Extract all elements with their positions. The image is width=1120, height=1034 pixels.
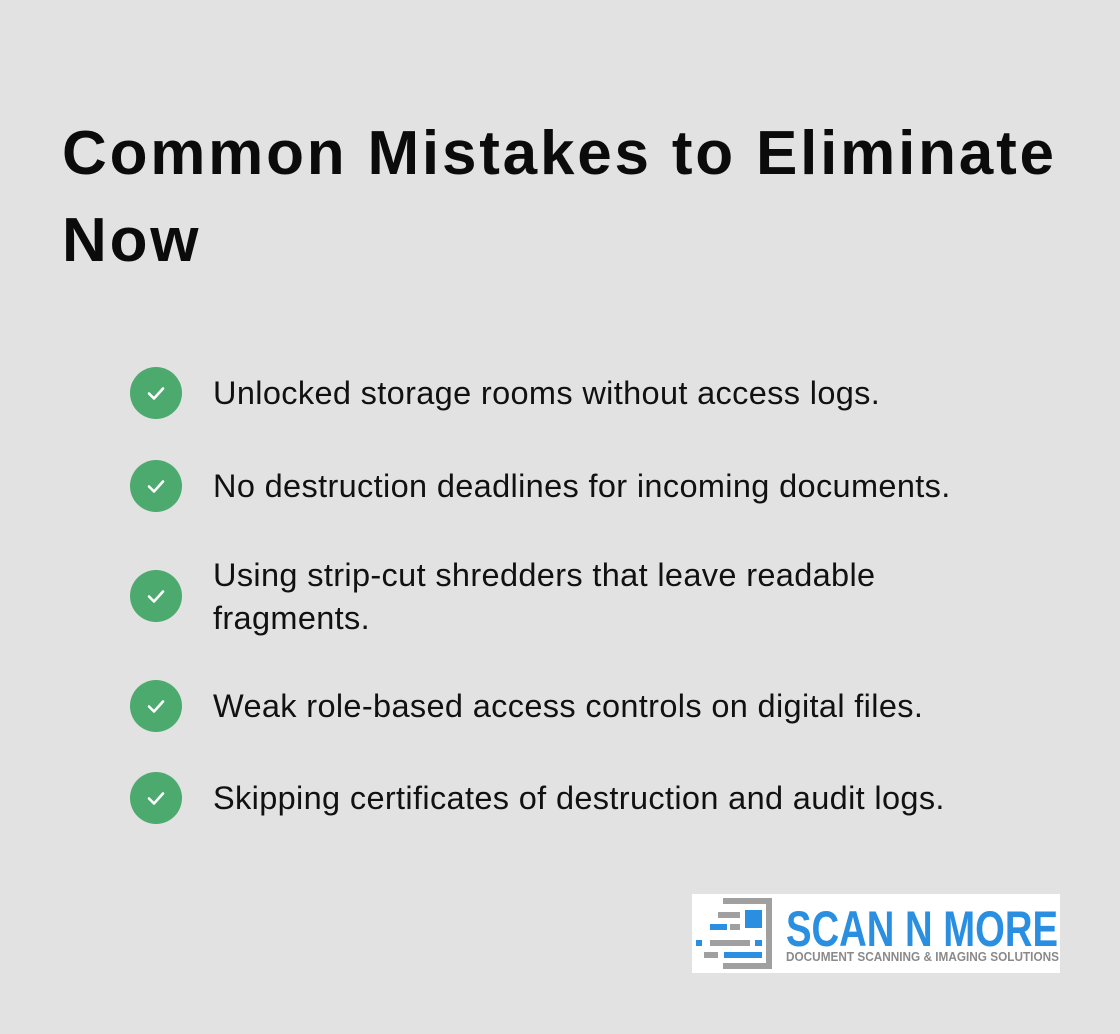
item 5	[130, 772, 945, 824]
item 1	[130, 367, 880, 419]
icon: check	[130, 570, 182, 622]
title: Common Mistakes to Eliminate	[62, 119, 1057, 188]
title: Now	[62, 206, 201, 275]
icon: check	[130, 460, 182, 512]
text: Skipping certificates of destruction and audit logs.	[213, 780, 945, 816]
title	[62, 119, 1057, 275]
item 3	[130, 557, 875, 636]
text: Unlocked storage rooms without access logs.	[213, 375, 880, 411]
icon: check	[130, 367, 182, 419]
text: Using strip-cut shredders that leave readable	[213, 557, 875, 593]
item 4	[130, 680, 923, 732]
icon: check	[130, 680, 182, 732]
item 2	[130, 460, 951, 512]
logo	[692, 894, 1060, 973]
text: fragments.	[213, 600, 370, 636]
text: No destruction deadlines for incoming documents.	[213, 468, 951, 504]
icon: check	[130, 772, 182, 824]
text: Weak role-based access controls on digital files.	[213, 688, 923, 724]
text	[213, 557, 875, 636]
